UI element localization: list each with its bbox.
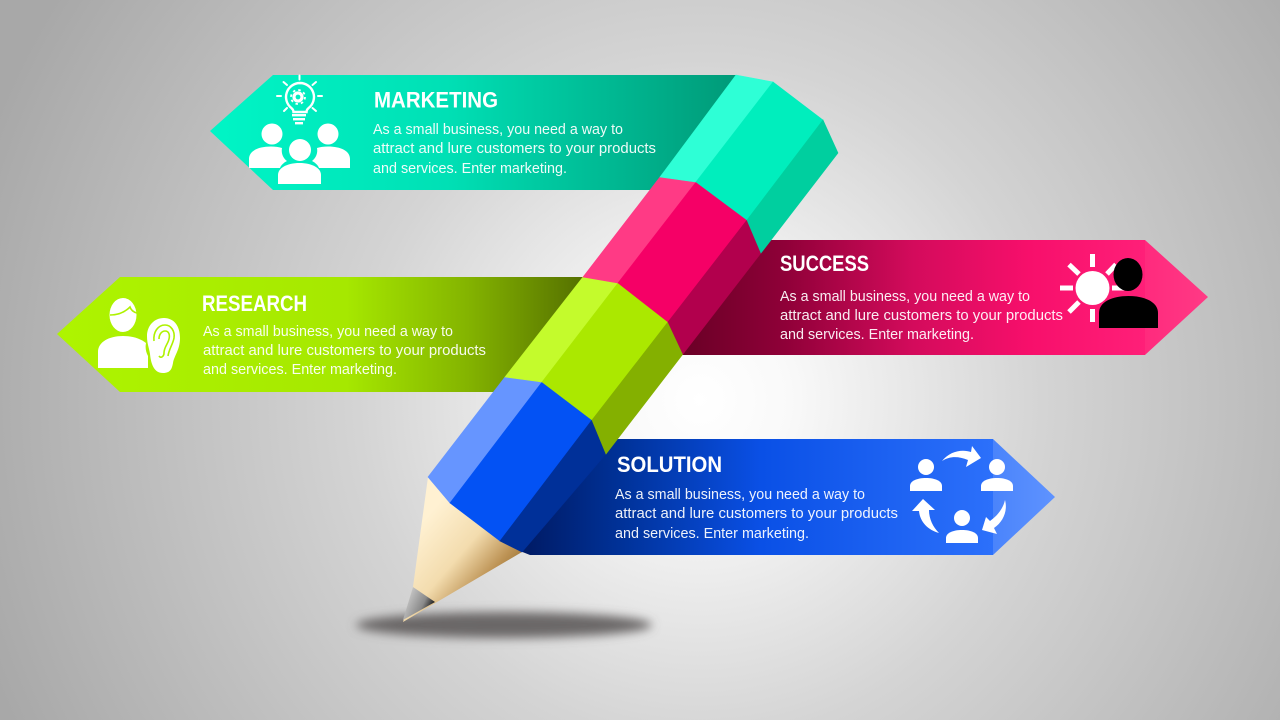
heading: marketing: MARKETING bbox=[374, 88, 498, 112]
banner: solution tip bbox=[993, 439, 1055, 555]
text: research body bbox=[203, 323, 486, 378]
text: research body: attract and lure customers to your products bbox=[203, 342, 486, 359]
pencil tip: lead bbox=[403, 587, 435, 620]
pencil shadow bbox=[356, 612, 652, 638]
pencil tip: wood bbox=[403, 477, 522, 622]
banner: research arrow bbox=[57, 277, 600, 392]
heading: success: SUCCESS bbox=[780, 251, 869, 276]
pencil segment: green bbox=[505, 277, 683, 454]
icon: sun and person bbox=[1060, 254, 1158, 328]
text: success body bbox=[780, 288, 1063, 343]
text: solution body: and services. Enter marketing. bbox=[615, 525, 809, 542]
pencil bbox=[403, 75, 838, 622]
pencil segment: teal bbox=[660, 75, 838, 253]
text: marketing body: attract and lure customers to your products bbox=[373, 140, 656, 157]
pencil segment: pink bbox=[583, 177, 761, 354]
text: solution body: attract and lure customers to your products bbox=[615, 505, 898, 522]
banner: marketing arrow bbox=[210, 75, 760, 190]
text: solution body bbox=[615, 486, 898, 542]
banner: success arrow bbox=[670, 240, 1145, 355]
text: success body: As a small business, you need a way to bbox=[780, 288, 1030, 305]
pencil segment: blue bbox=[428, 377, 606, 552]
text: marketing body: and services. Enter marketing. bbox=[373, 160, 567, 177]
icon: lightbulb and team bbox=[249, 76, 350, 184]
panel: research bbox=[57, 277, 600, 392]
heading: research: RESEARCH bbox=[202, 291, 307, 316]
heading: solution: SOLUTION bbox=[617, 452, 722, 477]
panel: solution bbox=[520, 439, 1055, 555]
text: solution body: As a small business, you need a way to bbox=[615, 486, 865, 503]
panel: marketing bbox=[210, 75, 760, 190]
text: success body: and services. Enter marketing. bbox=[780, 326, 974, 343]
text: marketing body bbox=[373, 121, 656, 177]
banner: solution arrow bbox=[520, 439, 993, 555]
panel: success bbox=[670, 240, 1208, 355]
banner: success tip bbox=[1145, 240, 1208, 355]
text: success body: attract and lure customers to your products bbox=[780, 307, 1063, 324]
text: research body: and services. Enter marketing. bbox=[203, 361, 397, 378]
text: marketing body: As a small business, you need a way to bbox=[373, 121, 623, 138]
text: research body: As a small business, you need a way to bbox=[203, 323, 453, 340]
icon: person and ear bbox=[98, 298, 180, 373]
icon: cycle of people bbox=[910, 446, 1013, 543]
